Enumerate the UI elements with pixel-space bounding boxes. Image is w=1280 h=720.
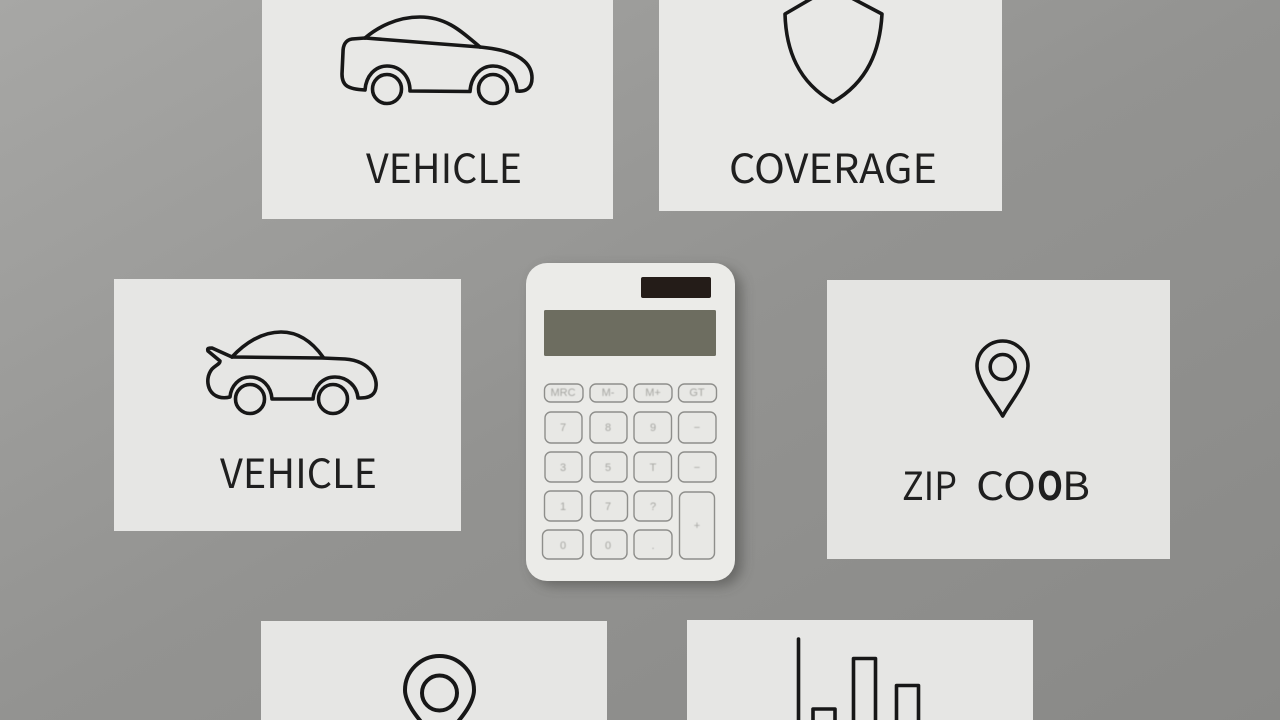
keypad: 0 — [605, 540, 611, 552]
keypad — [542, 384, 716, 559]
card: vehicle left — [114, 279, 461, 531]
keypad: MRC — [550, 387, 576, 399]
keypad: M+ — [645, 387, 661, 399]
keypad: + — [694, 520, 700, 532]
label: zip code: CO — [976, 456, 1036, 512]
label: zip code: ZIP — [902, 456, 957, 512]
display — [544, 310, 716, 356]
keypad: 0 — [560, 540, 566, 552]
label: coverage: COVERAGE — [729, 137, 937, 195]
keypad: M- — [602, 387, 615, 399]
label: vehicle: VEHICLE — [366, 137, 522, 195]
keypad: 8 — [605, 422, 611, 434]
keypad: GT — [689, 387, 705, 399]
keypad: 7 — [605, 501, 611, 513]
card: coverage — [659, 0, 1002, 211]
card: vehicle top — [262, 0, 613, 219]
keypad: ? — [650, 501, 656, 513]
label: zip code — [902, 456, 1090, 512]
keypad: − — [694, 422, 700, 434]
card: chart bottom — [687, 620, 1033, 720]
keypad: T — [650, 462, 657, 474]
keypad: 9 — [650, 422, 656, 434]
icon: shield — [785, 0, 882, 102]
calculator — [526, 263, 742, 586]
keypad: . — [651, 540, 655, 552]
icon: bar chart — [798, 639, 918, 720]
keypad: − — [694, 462, 700, 474]
icon: map pin — [405, 656, 474, 720]
icon: map pin — [977, 341, 1028, 416]
keypad: 5 — [605, 462, 611, 474]
card: location bottom — [261, 621, 607, 720]
icon: sedan car — [342, 17, 532, 104]
label: zip code: B — [1062, 456, 1090, 512]
keypad: 3 — [560, 462, 566, 474]
keypad: 1 — [560, 501, 566, 513]
solar panel — [641, 277, 711, 298]
icon: sports car — [208, 332, 376, 414]
card: zip code — [827, 280, 1170, 559]
label: zip code: O — [1037, 456, 1063, 512]
label: vehicle: VEHICLE — [220, 442, 377, 500]
keypad: 7 — [560, 422, 566, 434]
